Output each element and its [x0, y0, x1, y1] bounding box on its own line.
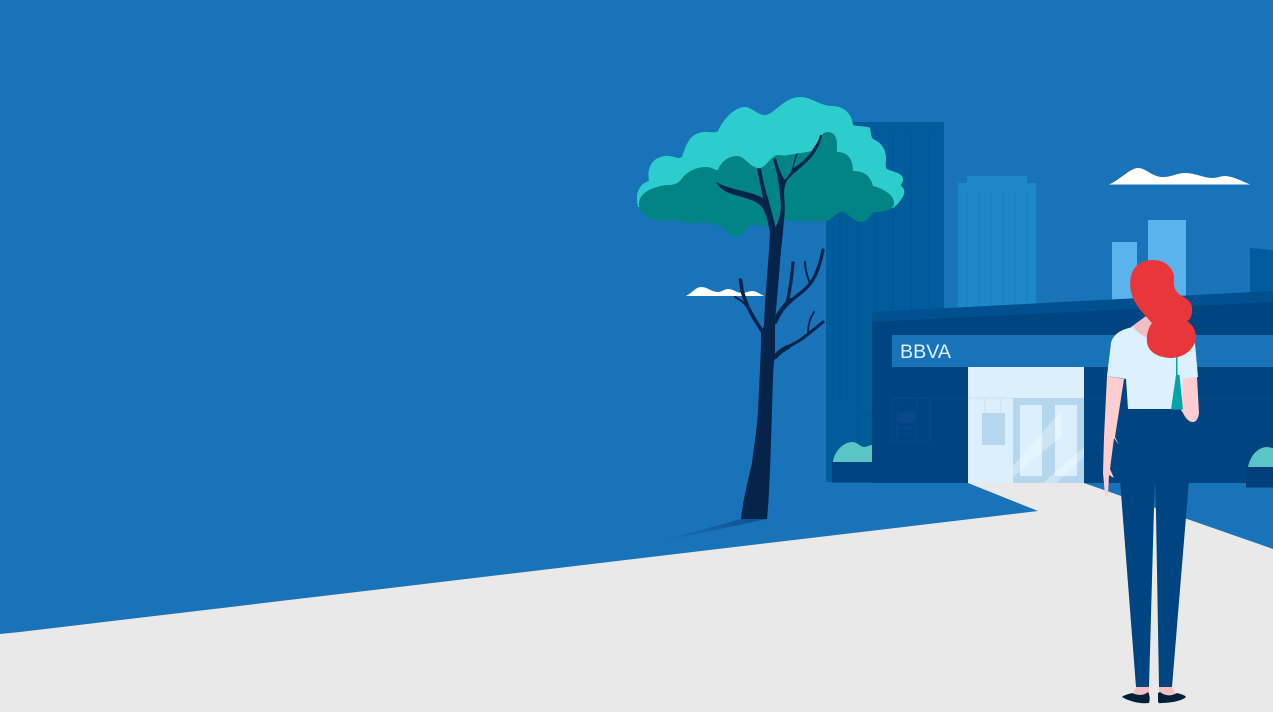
left planter with bush [832, 442, 874, 482]
left cloud [686, 287, 764, 296]
poster [982, 413, 1005, 445]
light blue tower [958, 176, 1036, 313]
tree [637, 97, 904, 543]
shoes [1122, 692, 1186, 703]
BBVA logo: BBVA [900, 341, 951, 363]
roof band [872, 291, 1273, 323]
ATM panel [892, 398, 930, 442]
right arm [1181, 377, 1199, 422]
shirt [1107, 327, 1198, 409]
trunk [741, 218, 784, 519]
neck [1131, 316, 1158, 339]
trousers [1120, 409, 1189, 687]
light canopy [637, 97, 904, 208]
hair [1130, 260, 1196, 358]
facade [872, 302, 1273, 483]
lower branches [735, 250, 823, 357]
ground path [0, 483, 1273, 712]
right planter with bush [1246, 447, 1273, 488]
facade line [892, 397, 1273, 399]
glass reflection [1013, 410, 1084, 483]
dark canopy [639, 132, 894, 237]
door frame [1013, 398, 1084, 483]
crown branches [716, 135, 822, 233]
sign band [892, 335, 1273, 367]
dark tower building [826, 122, 944, 482]
bag [1171, 355, 1183, 410]
tree shadow [653, 519, 767, 543]
door panels [1020, 405, 1042, 476]
woman [1103, 260, 1199, 703]
entrance [968, 367, 1084, 483]
left arm [1103, 376, 1124, 497]
right cloud [1109, 168, 1250, 184]
pale blue buildings [1112, 220, 1186, 302]
bank branch building [872, 291, 1273, 483]
feet [1132, 687, 1177, 696]
far right building [1250, 248, 1273, 295]
